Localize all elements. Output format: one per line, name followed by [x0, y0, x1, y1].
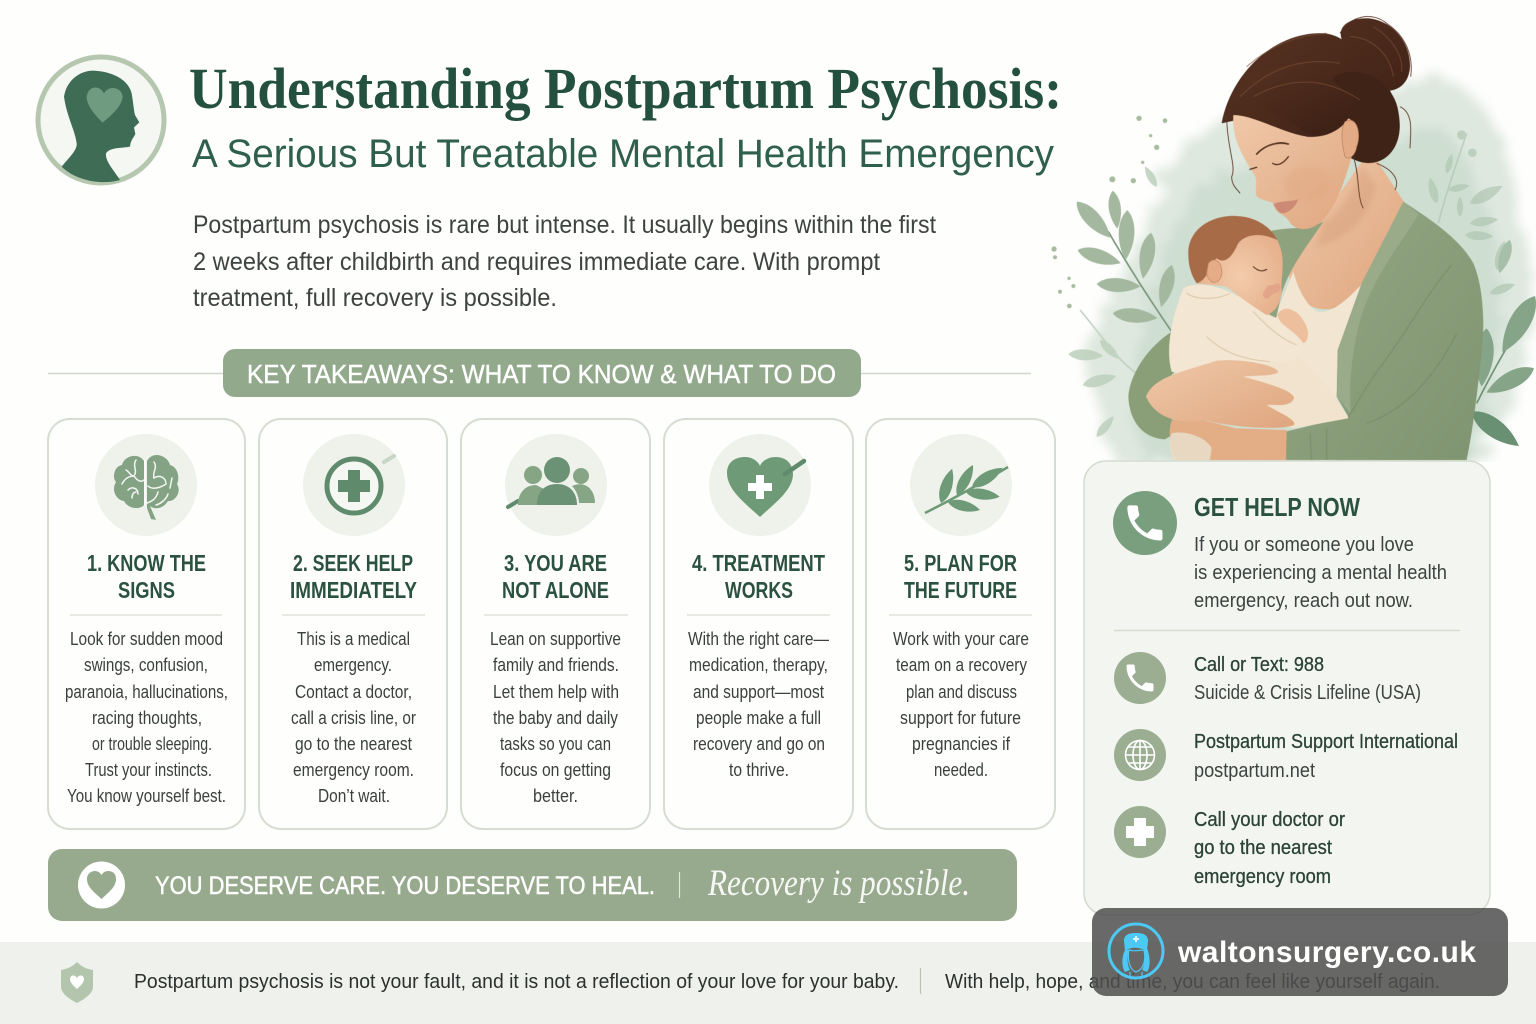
body text: medication, therapy, — [689, 655, 828, 675]
contact: call your doctor: go to the nearest — [1194, 836, 1332, 859]
body text: This is a medical — [297, 629, 410, 649]
contact: postpartum support international — [1114, 729, 1458, 782]
body text: Contact a doctor, — [295, 682, 412, 702]
heading — [87, 550, 206, 603]
heading: NOT ALONE — [502, 577, 609, 603]
cardigan front band — [1337, 202, 1419, 413]
help paragraph: is experiencing a mental health — [1194, 561, 1447, 584]
body text: family and friends. — [493, 655, 619, 675]
background faint leaves left — [1068, 165, 1160, 439]
card 2: seek help immediately — [259, 419, 447, 829]
intro paragraph: Postpartum psychosis is rare but intense. It usually begins within the first — [193, 211, 936, 239]
contact: call or text — [1114, 652, 1421, 704]
body text: paranoia, hallucinations, — [65, 682, 228, 702]
contact: call your doctor: emergency room — [1194, 865, 1331, 888]
mother's lower arm — [1170, 418, 1287, 460]
cardigan left collar — [1268, 222, 1324, 318]
face — [1233, 115, 1358, 229]
intro paragraph: 2 weeks after childbirth and requires immediate care. With prompt — [193, 248, 880, 276]
hair front sweep — [1222, 60, 1357, 136]
script tagline: Recovery is possible. — [707, 863, 970, 904]
body text: You know yourself best. — [67, 786, 226, 806]
icon: medical cross — [303, 434, 405, 536]
footer message right: With help, hope, and time, you can feel like yourself again. — [945, 970, 1440, 993]
heading: IMMEDIATELY — [290, 577, 417, 603]
intro paragraph: treatment, full recovery is possible. — [193, 284, 557, 312]
body text: and support—most — [693, 682, 824, 702]
spatter dots — [1051, 116, 1167, 308]
heading: 2. SEEK HELP — [293, 550, 413, 576]
baby hand — [1277, 309, 1308, 343]
sleeve shading — [1310, 265, 1457, 460]
body text: Trust your instincts. — [85, 760, 212, 780]
heading — [290, 550, 417, 603]
card 1: know the signs — [48, 419, 245, 829]
body text — [291, 629, 416, 806]
watermark badge — [1092, 908, 1508, 996]
body text: emergency room. — [293, 760, 414, 780]
loose hair wisps — [1227, 17, 1411, 208]
heading — [692, 550, 825, 603]
heading: GET HELP NOW — [1194, 492, 1360, 522]
background faint leaves right — [1426, 130, 1516, 297]
ear — [1342, 120, 1359, 158]
panel: get help now — [1084, 461, 1490, 915]
heading — [904, 550, 1017, 603]
help paragraph: If you or someone you love — [1194, 533, 1414, 556]
body text — [490, 629, 621, 806]
body text: team on a recovery — [896, 655, 1027, 675]
heading: 1. KNOW THE — [87, 550, 206, 576]
baby head — [1188, 216, 1283, 315]
heading: 5. PLAN FOR — [904, 550, 1017, 576]
body text: support for future — [900, 708, 1021, 728]
body text: Lean on supportive — [490, 629, 621, 649]
card 3: you are not alone — [461, 419, 650, 829]
logo: head silhouette with heart — [38, 57, 164, 183]
heading — [502, 550, 609, 603]
icon: leaf sprig — [910, 434, 1012, 536]
icon: brain — [95, 434, 197, 536]
body text: call a crisis line, or — [291, 708, 416, 728]
heading: THE FUTURE — [904, 577, 1017, 603]
body text: plan and discuss — [906, 682, 1017, 702]
baby hair — [1188, 216, 1277, 283]
heading: WORKS — [725, 577, 793, 603]
section heading pill: key takeaways: KEY TAKEAWAYS: WHAT TO KNOW & WHAT TO DO — [247, 359, 836, 389]
body text: people make a full — [696, 708, 821, 728]
body text: Let them help with — [493, 682, 619, 702]
body text: recovery and go on — [693, 734, 825, 754]
body text: emergency. — [314, 655, 392, 675]
right foreground branch — [1474, 240, 1536, 446]
help paragraph: emergency, reach out now. — [1194, 589, 1413, 612]
body text: With the right care— — [688, 629, 829, 649]
body text: focus on getting — [500, 760, 611, 780]
contact: call or text: Suicide & Crisis Lifeline (USA) — [1194, 681, 1421, 704]
left foreground branch — [1071, 190, 1178, 332]
contact: call your doctor: Call your doctor or — [1194, 808, 1345, 831]
cheek blush — [1283, 165, 1330, 202]
body text: swings, confusion, — [84, 655, 208, 675]
body text: or trouble sleeping. — [92, 734, 212, 754]
cream top — [1273, 272, 1363, 400]
cardigan body — [1285, 202, 1483, 460]
card 5: plan for the future — [866, 419, 1055, 829]
body text: needed. — [934, 760, 988, 780]
mother's upper hand — [1146, 360, 1294, 428]
neck and chest — [1287, 150, 1405, 309]
body text: Work with your care — [893, 629, 1029, 649]
body text: better. — [533, 786, 578, 806]
body text: Don’t wait. — [318, 786, 390, 806]
contact: call or text: Call or Text: 988 — [1194, 653, 1324, 676]
lower back hair mass — [1333, 72, 1400, 163]
heading: 4. TREATMENT — [692, 550, 825, 576]
intro paragraph — [193, 211, 936, 312]
facial details — [1250, 143, 1298, 213]
body text: Look for sudden mood — [70, 629, 223, 649]
body text — [65, 629, 228, 806]
subtitle: A Serious But Treatable Mental Health Emergency — [192, 132, 1054, 176]
baby blanket lower — [1240, 357, 1348, 428]
body text — [688, 629, 829, 780]
banner: you deserve care — [48, 849, 1017, 921]
illustration: mother holding baby — [1051, 17, 1536, 467]
body text: racing thoughts, — [92, 708, 202, 728]
hair strands — [1240, 27, 1402, 100]
icon: shield with heart — [61, 962, 93, 1003]
icon: heart with cross — [709, 434, 811, 536]
title: Understanding Postpartum Psychosis: — [189, 56, 1062, 121]
footer message left: Postpartum psychosis is not your fault, and it is not a reflection of your love for your baby. — [134, 970, 899, 993]
heading: 3. YOU ARE — [504, 550, 607, 576]
body text — [893, 629, 1029, 780]
contact: postpartum support international: Postpartum Support International — [1194, 730, 1458, 753]
baby body — [1168, 284, 1291, 374]
footer band — [0, 942, 1536, 1024]
body text: pregnancies if — [912, 734, 1011, 754]
icon: three people — [505, 434, 607, 536]
banner message: YOU DESERVE CARE. YOU DESERVE TO HEAL. — [155, 872, 655, 900]
help paragraph — [1194, 533, 1447, 612]
contact: call your doctor — [1114, 806, 1345, 888]
neck shadow — [1320, 172, 1374, 244]
body text: the baby and daily — [493, 708, 618, 728]
body text: go to the nearest — [295, 734, 412, 754]
card 4: treatment works — [664, 419, 853, 829]
body text: to thrive. — [729, 760, 789, 780]
body text: tasks so you can — [500, 734, 611, 754]
hair back and bun — [1222, 18, 1410, 163]
watercolor wash — [1087, 75, 1532, 467]
heading: SIGNS — [118, 577, 175, 603]
icon: phone — [1113, 491, 1177, 555]
contact: postpartum support international: postpartum.net — [1194, 759, 1315, 782]
icon: heart in circle — [78, 862, 125, 908]
baby ear and face details — [1207, 260, 1281, 299]
left sleeve — [1128, 332, 1174, 440]
icon: nurse logo — [1109, 924, 1163, 978]
section heading pill: key takeaways — [223, 349, 861, 397]
watermark text: waltonsurgery.co.uk — [1177, 936, 1476, 969]
